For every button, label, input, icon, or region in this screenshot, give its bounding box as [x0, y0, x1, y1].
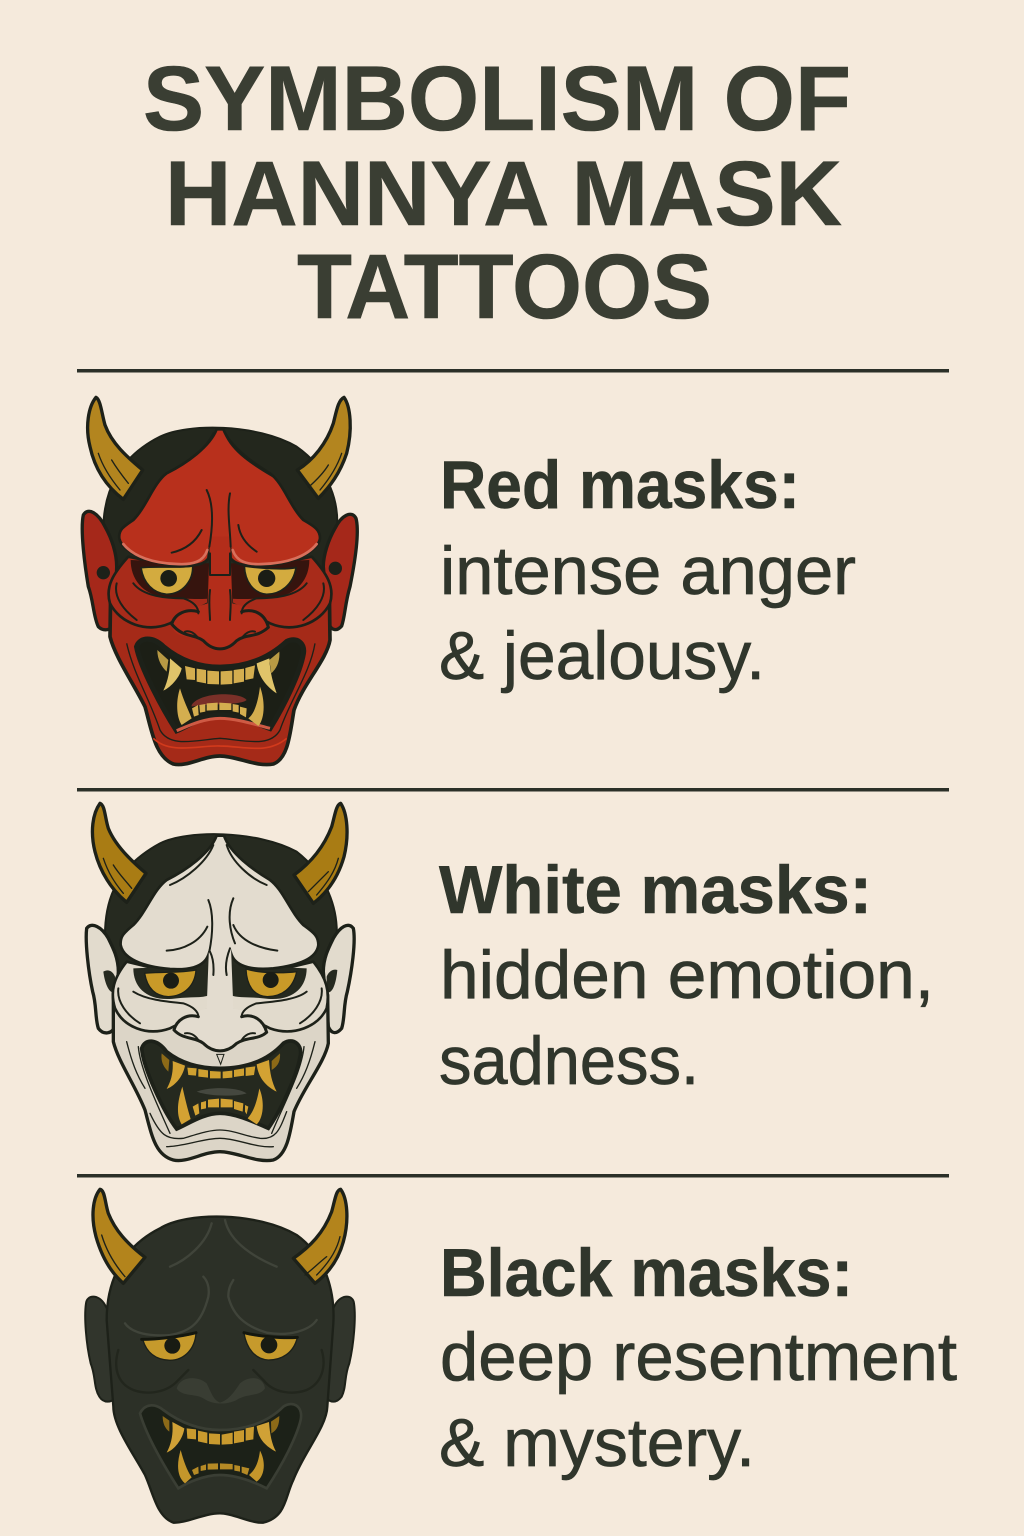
- panel: black mask: [85, 1189, 957, 1523]
- text: red masks: Red masks:: [440, 447, 800, 523]
- text: red masks: [439, 447, 856, 694]
- text: white masks: [439, 852, 934, 1099]
- icon: red hannya mask: [82, 397, 357, 765]
- title: SYMBOLISM OF: [143, 48, 851, 150]
- text: white masks: White masks:: [439, 852, 872, 928]
- text: black masks: deep resentment: [440, 1319, 957, 1395]
- title: TATTOOS: [297, 236, 712, 338]
- text: red masks: & jealousy.: [439, 618, 765, 694]
- icon: black hannya mask: [85, 1189, 355, 1523]
- title: HANNYA MASK: [165, 143, 842, 245]
- text: white masks: sadness.: [439, 1023, 699, 1099]
- text: white masks: hidden emotion,: [440, 937, 934, 1013]
- panel: white mask: [86, 803, 934, 1161]
- icon: white hannya mask: [86, 803, 354, 1161]
- text: black masks: [439, 1235, 957, 1481]
- text: black masks: Black masks:: [440, 1235, 853, 1311]
- panel: red mask: [82, 397, 856, 765]
- text: red masks: intense anger: [440, 533, 856, 609]
- title: [143, 48, 851, 338]
- text: black masks: & mystery.: [439, 1405, 755, 1481]
